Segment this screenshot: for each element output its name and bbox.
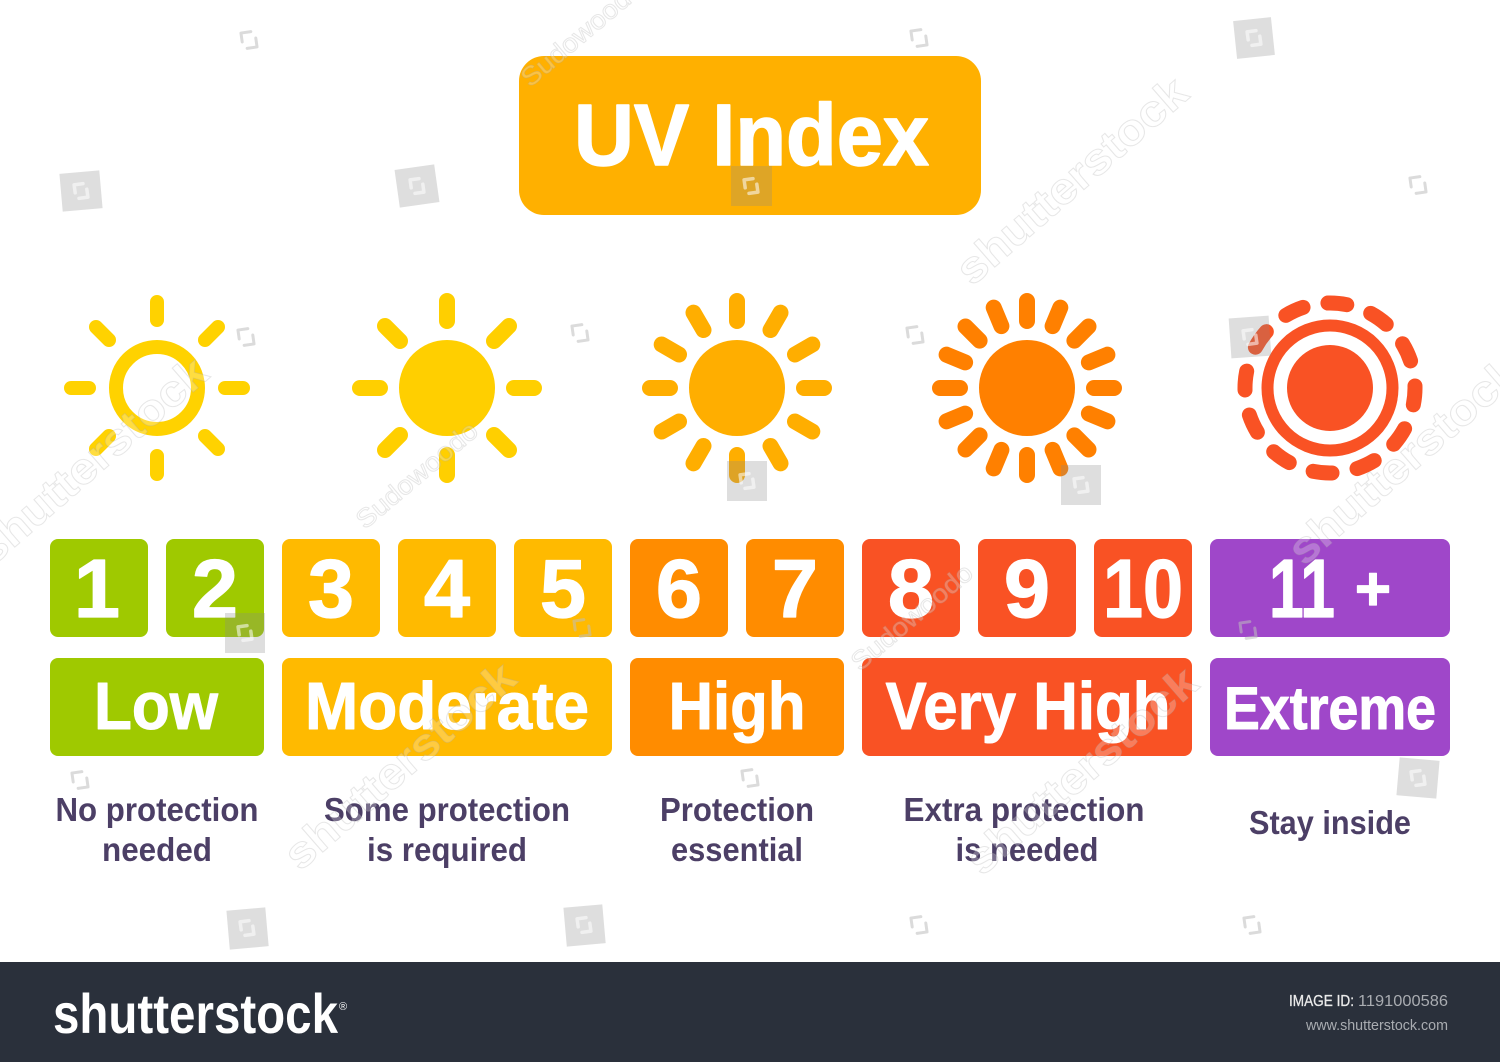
tile 7 (746, 539, 844, 637)
label: very high: Very High (886, 669, 1170, 744)
tile 1: 1 (74, 542, 120, 635)
label: high (630, 658, 844, 756)
watermark text: Sudowoodo (845, 557, 979, 677)
footer image id number: 1191000586 (1358, 993, 1448, 1010)
caption: very high: Extra protection (904, 791, 1144, 828)
caption: moderate: Some protection (324, 791, 570, 828)
tile 2: 2 (192, 542, 238, 635)
tile 6 (630, 539, 728, 637)
tile 6: 6 (656, 542, 702, 635)
icon: very high sun (940, 301, 1114, 475)
label: low: Low (94, 669, 219, 744)
tile 8 (862, 539, 960, 637)
number scale (50, 539, 1450, 637)
caption: very high: is needed (956, 831, 1098, 868)
icon: low sun (71, 302, 243, 474)
tile 5: 5 (540, 542, 586, 635)
icon: moderate sun (360, 301, 534, 475)
footer image id label: IMAGE ID: (1289, 993, 1354, 1010)
watermark marks in squares (74, 30, 1425, 936)
footer bar (0, 962, 1500, 1062)
title (519, 56, 981, 215)
watermark text: shutterstock (956, 657, 1208, 885)
watermark text: shutterstock (946, 67, 1198, 295)
icon: extreme sun (1243, 301, 1417, 475)
tile 8: 8 (888, 542, 934, 635)
tile 3 (282, 539, 380, 637)
tile 2 (166, 539, 264, 637)
footer logo: shutterstock (53, 982, 339, 1045)
tile 10: 10 (1103, 542, 1183, 635)
watermark text: Sudowoodo (350, 415, 484, 535)
caption: low: needed (102, 831, 212, 868)
tile 11+: + (1355, 555, 1391, 624)
label: low (50, 658, 264, 756)
title: UV Index (574, 87, 929, 184)
captions (56, 791, 1411, 868)
tile 4 (398, 539, 496, 637)
footer registered mark: ® (339, 1001, 347, 1013)
label: moderate: Moderate (305, 669, 589, 744)
caption: low (56, 791, 258, 868)
caption: very high (904, 791, 1144, 868)
tile 9: 9 (1004, 542, 1050, 635)
tile 9 (978, 539, 1076, 637)
category labels (50, 658, 1450, 756)
caption: moderate (324, 791, 570, 868)
label: extreme: Extreme (1224, 675, 1436, 742)
tile 4: 4 (424, 542, 470, 635)
caption: high: Protection (660, 791, 814, 828)
label: extreme (1210, 658, 1450, 756)
footer url: www.shutterstock.com (1305, 1018, 1448, 1034)
tile 3: 3 (308, 542, 354, 635)
tile 11+: 11 (1269, 542, 1335, 635)
tile 1 (50, 539, 148, 637)
watermark loose marks (72, 29, 1426, 934)
caption: extreme: Stay inside (1249, 804, 1411, 841)
caption: low: No protection (56, 791, 258, 828)
caption: moderate: is required (367, 831, 527, 868)
icon: high sun (650, 301, 824, 475)
caption: high: essential (671, 831, 803, 868)
label: moderate (282, 658, 612, 756)
tile 11+ (1210, 539, 1450, 637)
tile 5 (514, 539, 612, 637)
watermark text: shutterstock (274, 652, 526, 880)
tile 7: 7 (772, 542, 818, 635)
label: high: High (668, 669, 806, 744)
caption: high (660, 791, 814, 868)
